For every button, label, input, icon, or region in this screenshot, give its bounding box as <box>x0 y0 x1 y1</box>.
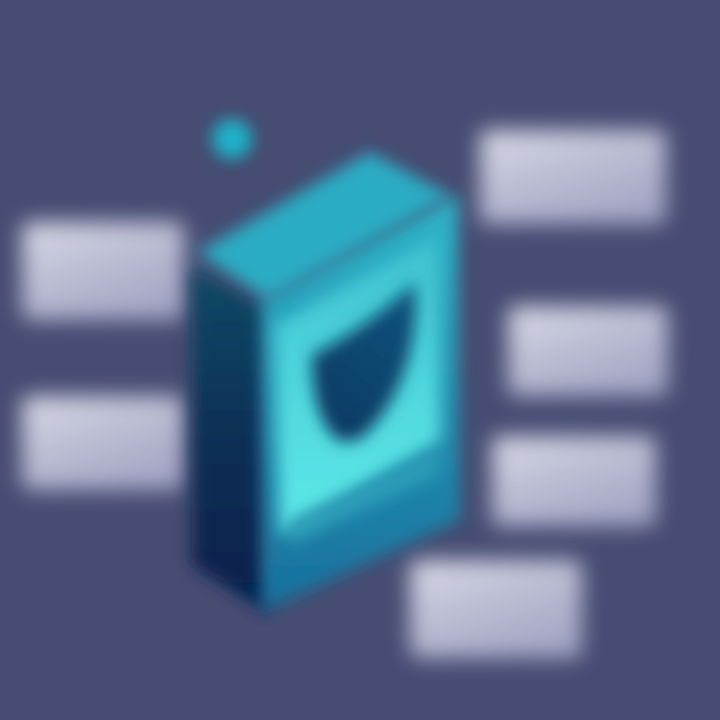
icon: shield <box>312 282 416 442</box>
box right face <box>262 195 460 612</box>
card: lower right <box>492 436 656 526</box>
box top face <box>198 152 452 300</box>
card: lower left <box>22 396 184 490</box>
box lower band <box>288 452 440 544</box>
card: middle right <box>508 306 668 396</box>
card: top right <box>480 130 666 224</box>
card: upper left <box>22 222 184 320</box>
box front panel <box>275 235 440 535</box>
icon: teal dot <box>212 119 252 159</box>
card: bottom <box>410 560 582 658</box>
box left face <box>192 268 268 612</box>
isometric box with shield <box>192 152 460 612</box>
